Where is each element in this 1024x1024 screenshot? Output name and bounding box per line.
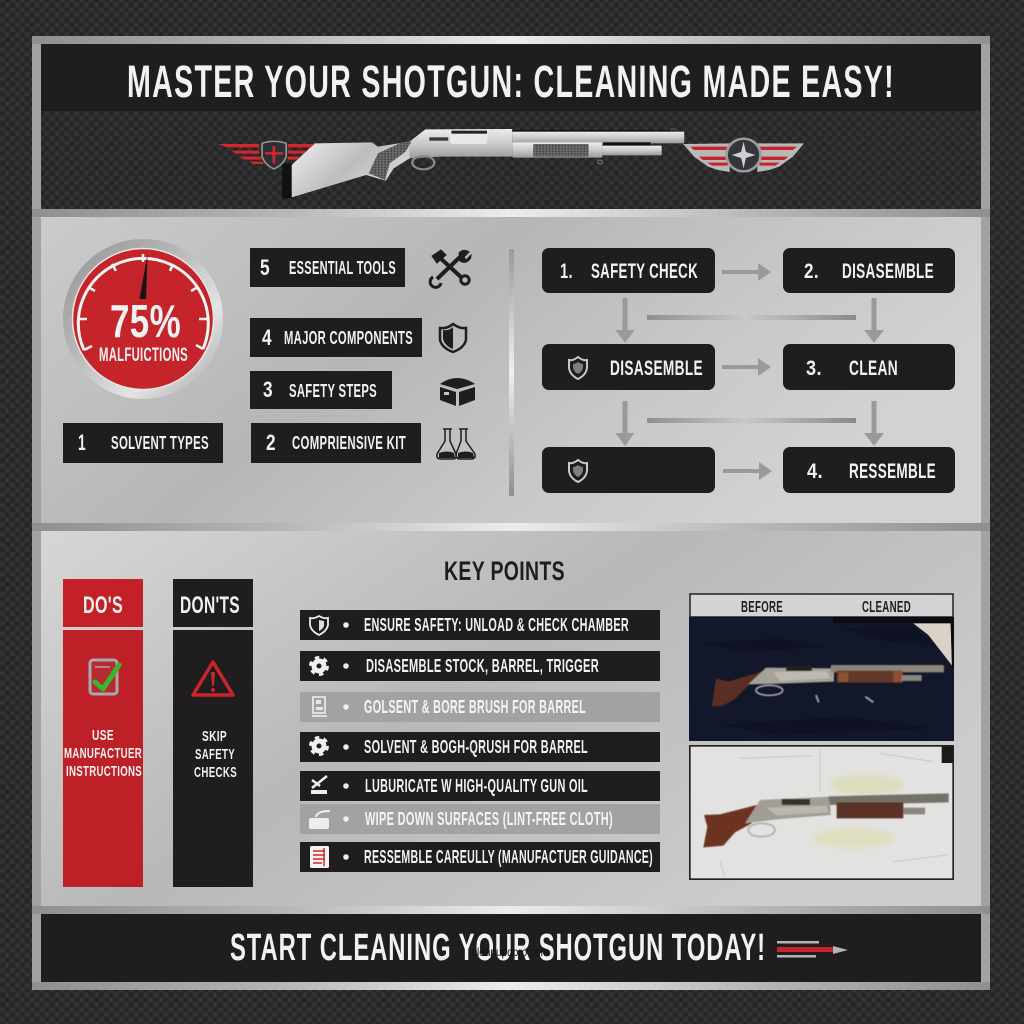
photo: before (689, 617, 954, 741)
emblem: right winged badge (683, 139, 804, 172)
divider (32, 523, 990, 531)
watermark text: cleanupdbro.com (472, 945, 549, 959)
panel: header (41, 44, 981, 209)
icon: crossed tools (430, 250, 471, 287)
panel: statistics and process (41, 217, 981, 523)
illustration: shotgun with emblems (218, 128, 804, 198)
don'ts column: SKIP (202, 728, 227, 745)
stat: 5 essential tools: 5 (260, 255, 270, 280)
photo: cleaned (689, 745, 954, 880)
do's column: MANUFACTUER (64, 745, 142, 762)
item: solvent and bore brush (300, 692, 660, 722)
do's column: INSTRUCTIONS (66, 763, 142, 780)
step blank shield (542, 447, 715, 493)
heading: key points: KEY POINTS (444, 556, 565, 586)
icon: warning triangle (193, 662, 233, 695)
step 2 disassemble: DISASEMBLE (842, 260, 934, 283)
stat: 1 solvent types: 1 (78, 430, 86, 455)
step shield disassemble: DISASEMBLE (610, 357, 703, 380)
icon: checklist (90, 660, 119, 694)
gauge: 75% malfunctions (63, 239, 223, 399)
item: disassemble: DISASEMBLE STOCK, BARREL, TRIGGER (366, 656, 599, 676)
step 4 reassemble: 4. (807, 460, 823, 483)
title bar (41, 44, 981, 111)
stat: 3 safety steps (250, 371, 392, 409)
stat: 2 comprehensive kit: COMPRIENSIVE KIT (292, 433, 406, 453)
item: ensure safety (300, 610, 660, 640)
item: disassemble (300, 651, 660, 681)
banner: call to action (41, 914, 981, 982)
panel: key points (41, 531, 981, 906)
item: lubricate (300, 771, 660, 801)
item: reassemble (300, 842, 660, 872)
item: solvent and bore brush: GOLSENT & BORE BRUSH FOR BARREL (364, 697, 586, 717)
stat: 5 essential tools (250, 248, 405, 287)
step 3 clean: 3. (806, 357, 822, 380)
icon: bullet (777, 941, 848, 958)
stat: 2 comprehensive kit: 2 (266, 430, 276, 455)
stat: 1 solvent types: SOLVENT TYPES (111, 433, 209, 453)
icon: box (440, 378, 475, 406)
gauge: 75% malfunctions: 75% (110, 295, 181, 347)
photos: before and cleaned (689, 594, 954, 880)
step 1 safety check: 1. (560, 260, 573, 283)
photo header labels: CLEANED (862, 599, 911, 616)
photo header labels: BEFORE (741, 599, 783, 616)
divider (32, 906, 990, 914)
item: wipe down (300, 804, 660, 834)
icon: flasks (437, 429, 475, 459)
photo header labels (690, 594, 953, 617)
stat: 4 major components (250, 318, 422, 357)
item: lubricate: LUBURICATE W HIGH-QUALITY GUN OIL (365, 776, 588, 796)
item: reassemble: RESSEMBLE CAREULLY (MANUFACTUER GUIDANCE) (364, 847, 653, 867)
do's column: DO'S (83, 592, 123, 619)
step 1 safety check: SAFETY CHECK (591, 260, 698, 283)
stat: 2 comprehensive kit (251, 423, 421, 463)
stat: 3 safety steps: SAFETY STEPS (289, 381, 377, 401)
icon: shield (440, 324, 466, 352)
do's column (63, 579, 143, 887)
divider: vertical (509, 249, 514, 496)
step 2 disassemble (783, 248, 955, 293)
divider (32, 209, 990, 217)
stat: 3 safety steps: 3 (263, 377, 273, 402)
gauge: 75% malfunctions: MALFUICTIONS (99, 345, 188, 366)
emblem: left winged shield (218, 141, 315, 169)
flowchart (542, 248, 955, 493)
step 3 clean (783, 344, 955, 390)
step 1 safety check (542, 248, 715, 293)
step shield disassemble (542, 344, 715, 390)
stat: 1 solvent types (63, 423, 223, 463)
item: solvent and brush (300, 732, 660, 762)
item: ensure safety: ENSURE SAFETY: UNLOAD & CHECK CHAMBER (364, 615, 629, 635)
don'ts column: SAFETY (195, 746, 235, 763)
step 4 reassemble (783, 447, 955, 493)
step 4 reassemble: RESSEMBLE (849, 460, 936, 483)
don'ts column (173, 579, 253, 887)
step 3 clean: CLEAN (849, 357, 898, 380)
item: wipe down: WIPE DOWN SURFACES (LINT-FREE CLOTH) (365, 809, 613, 829)
list: key points (300, 610, 660, 872)
stat: 5 essential tools: ESSENTIAL TOOLS (289, 258, 396, 278)
do's column: USE (92, 727, 114, 744)
don'ts column: CHECKS (194, 764, 237, 781)
don'ts column: DON'TS (180, 592, 240, 619)
stat: 4 major components: MAJOR COMPONENTS (284, 328, 413, 348)
step 2 disassemble: 2. (804, 260, 819, 283)
stat: 4 major components: 4 (262, 325, 272, 350)
item: solvent and brush: SOLVENT & BOGH-QRUSH FOR BARREL (364, 737, 588, 757)
arrows (616, 263, 884, 480)
